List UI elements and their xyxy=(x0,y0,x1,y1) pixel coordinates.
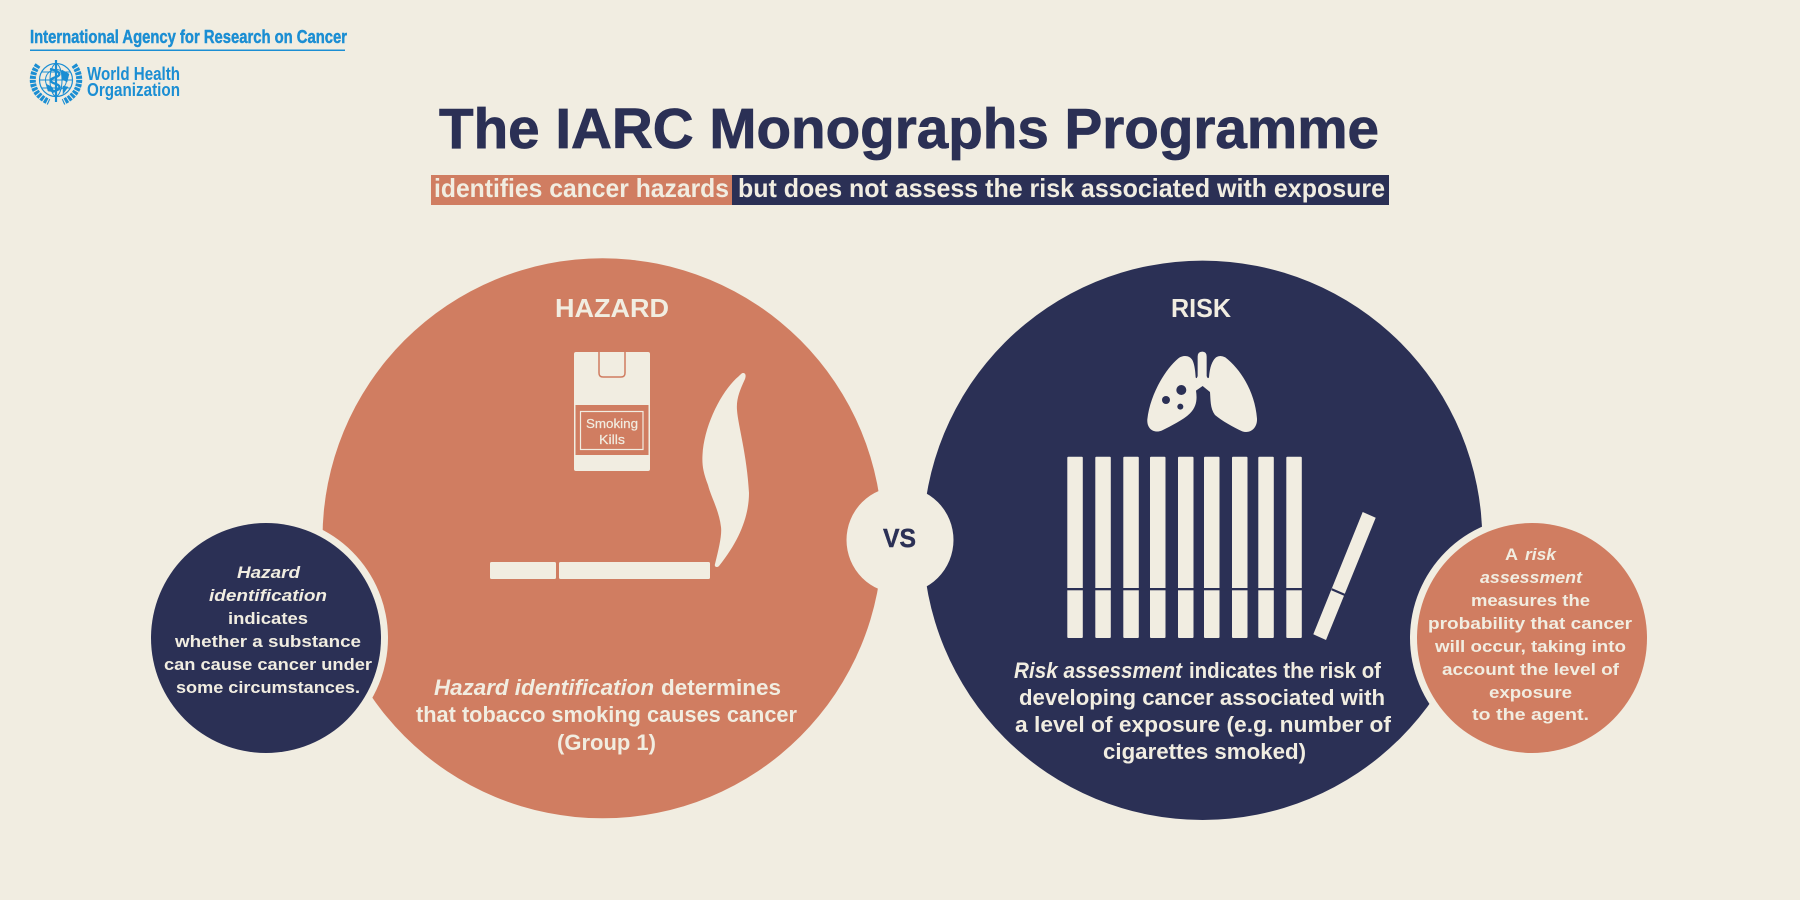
risk description: cigarettes smoked) xyxy=(1103,739,1306,764)
callout: hazard identification: indicates xyxy=(228,609,308,628)
callout: risk assessment: risk xyxy=(1525,545,1558,564)
heading: hazard: HAZARD xyxy=(555,293,669,323)
icon: cigarette xyxy=(490,562,710,579)
panel: hazard xyxy=(322,258,882,818)
callout: hazard identification: some circumstances. xyxy=(176,678,360,697)
icon: tilted cigarette xyxy=(1313,512,1376,640)
risk description: developing cancer associated with xyxy=(1019,685,1385,710)
badge: VS: VS xyxy=(883,523,916,553)
subtitle banner xyxy=(431,173,1389,205)
risk description: a level of exposure (e.g. number of xyxy=(1015,712,1392,737)
badge: VS xyxy=(846,486,954,594)
icon: cigarette pack: Smoking xyxy=(586,416,638,431)
hazard description xyxy=(416,675,797,755)
icon: cigarette pack xyxy=(574,352,650,471)
callout: risk assessment: to the agent. xyxy=(1472,705,1589,724)
callout: risk assessment: assessment xyxy=(1480,568,1583,587)
callout: risk assessment: will occur, taking into xyxy=(1434,637,1626,656)
callout: risk assessment: account the level of xyxy=(1442,660,1619,679)
logo: IARC and WHO: Organization xyxy=(87,80,180,100)
risk description: Risk assessment xyxy=(1014,658,1184,683)
organization name: World Health xyxy=(87,64,180,84)
callout: hazard identification: can cause cancer under xyxy=(164,655,372,674)
callout: hazard identification: identification xyxy=(209,586,327,605)
icon: row of cigarettes xyxy=(1060,457,1310,638)
callout: hazard identification: Hazard xyxy=(237,563,301,582)
logo: IARC and WHO xyxy=(30,27,347,102)
callout: hazard identification xyxy=(144,516,388,760)
icon: WHO emblem xyxy=(33,60,79,102)
risk description xyxy=(1014,658,1392,764)
risk description: indicates the risk of xyxy=(1189,658,1382,683)
callout: risk assessment xyxy=(1410,516,1654,760)
hazard description: that tobacco smoking causes cancer xyxy=(416,702,797,727)
hazard description: Hazard identification xyxy=(434,675,654,700)
icon: cigarette pack: Kills xyxy=(599,432,626,447)
icon: smoke xyxy=(702,373,749,567)
callout: risk assessment: probability that cancer xyxy=(1428,614,1632,633)
hazard description: (Group 1) xyxy=(557,730,656,755)
panel: risk xyxy=(923,261,1482,820)
heading: risk: RISK xyxy=(1171,293,1231,323)
callout: risk assessment: exposure xyxy=(1489,683,1572,702)
agency name: International Agency for Research on Cancer xyxy=(30,27,347,47)
subtitle: hazards part: identifies cancer hazards xyxy=(434,173,729,203)
callout: hazard identification: whether a substance xyxy=(174,632,361,651)
callout: risk assessment: A xyxy=(1505,545,1518,564)
hazard description: determines xyxy=(661,675,781,700)
title: The IARC Monographs Programme xyxy=(439,97,1379,161)
callout: risk assessment: measures the xyxy=(1471,591,1590,610)
icon: lungs xyxy=(1147,352,1257,432)
subtitle: risk part: but does not assess the risk associated with exposure xyxy=(738,173,1385,203)
